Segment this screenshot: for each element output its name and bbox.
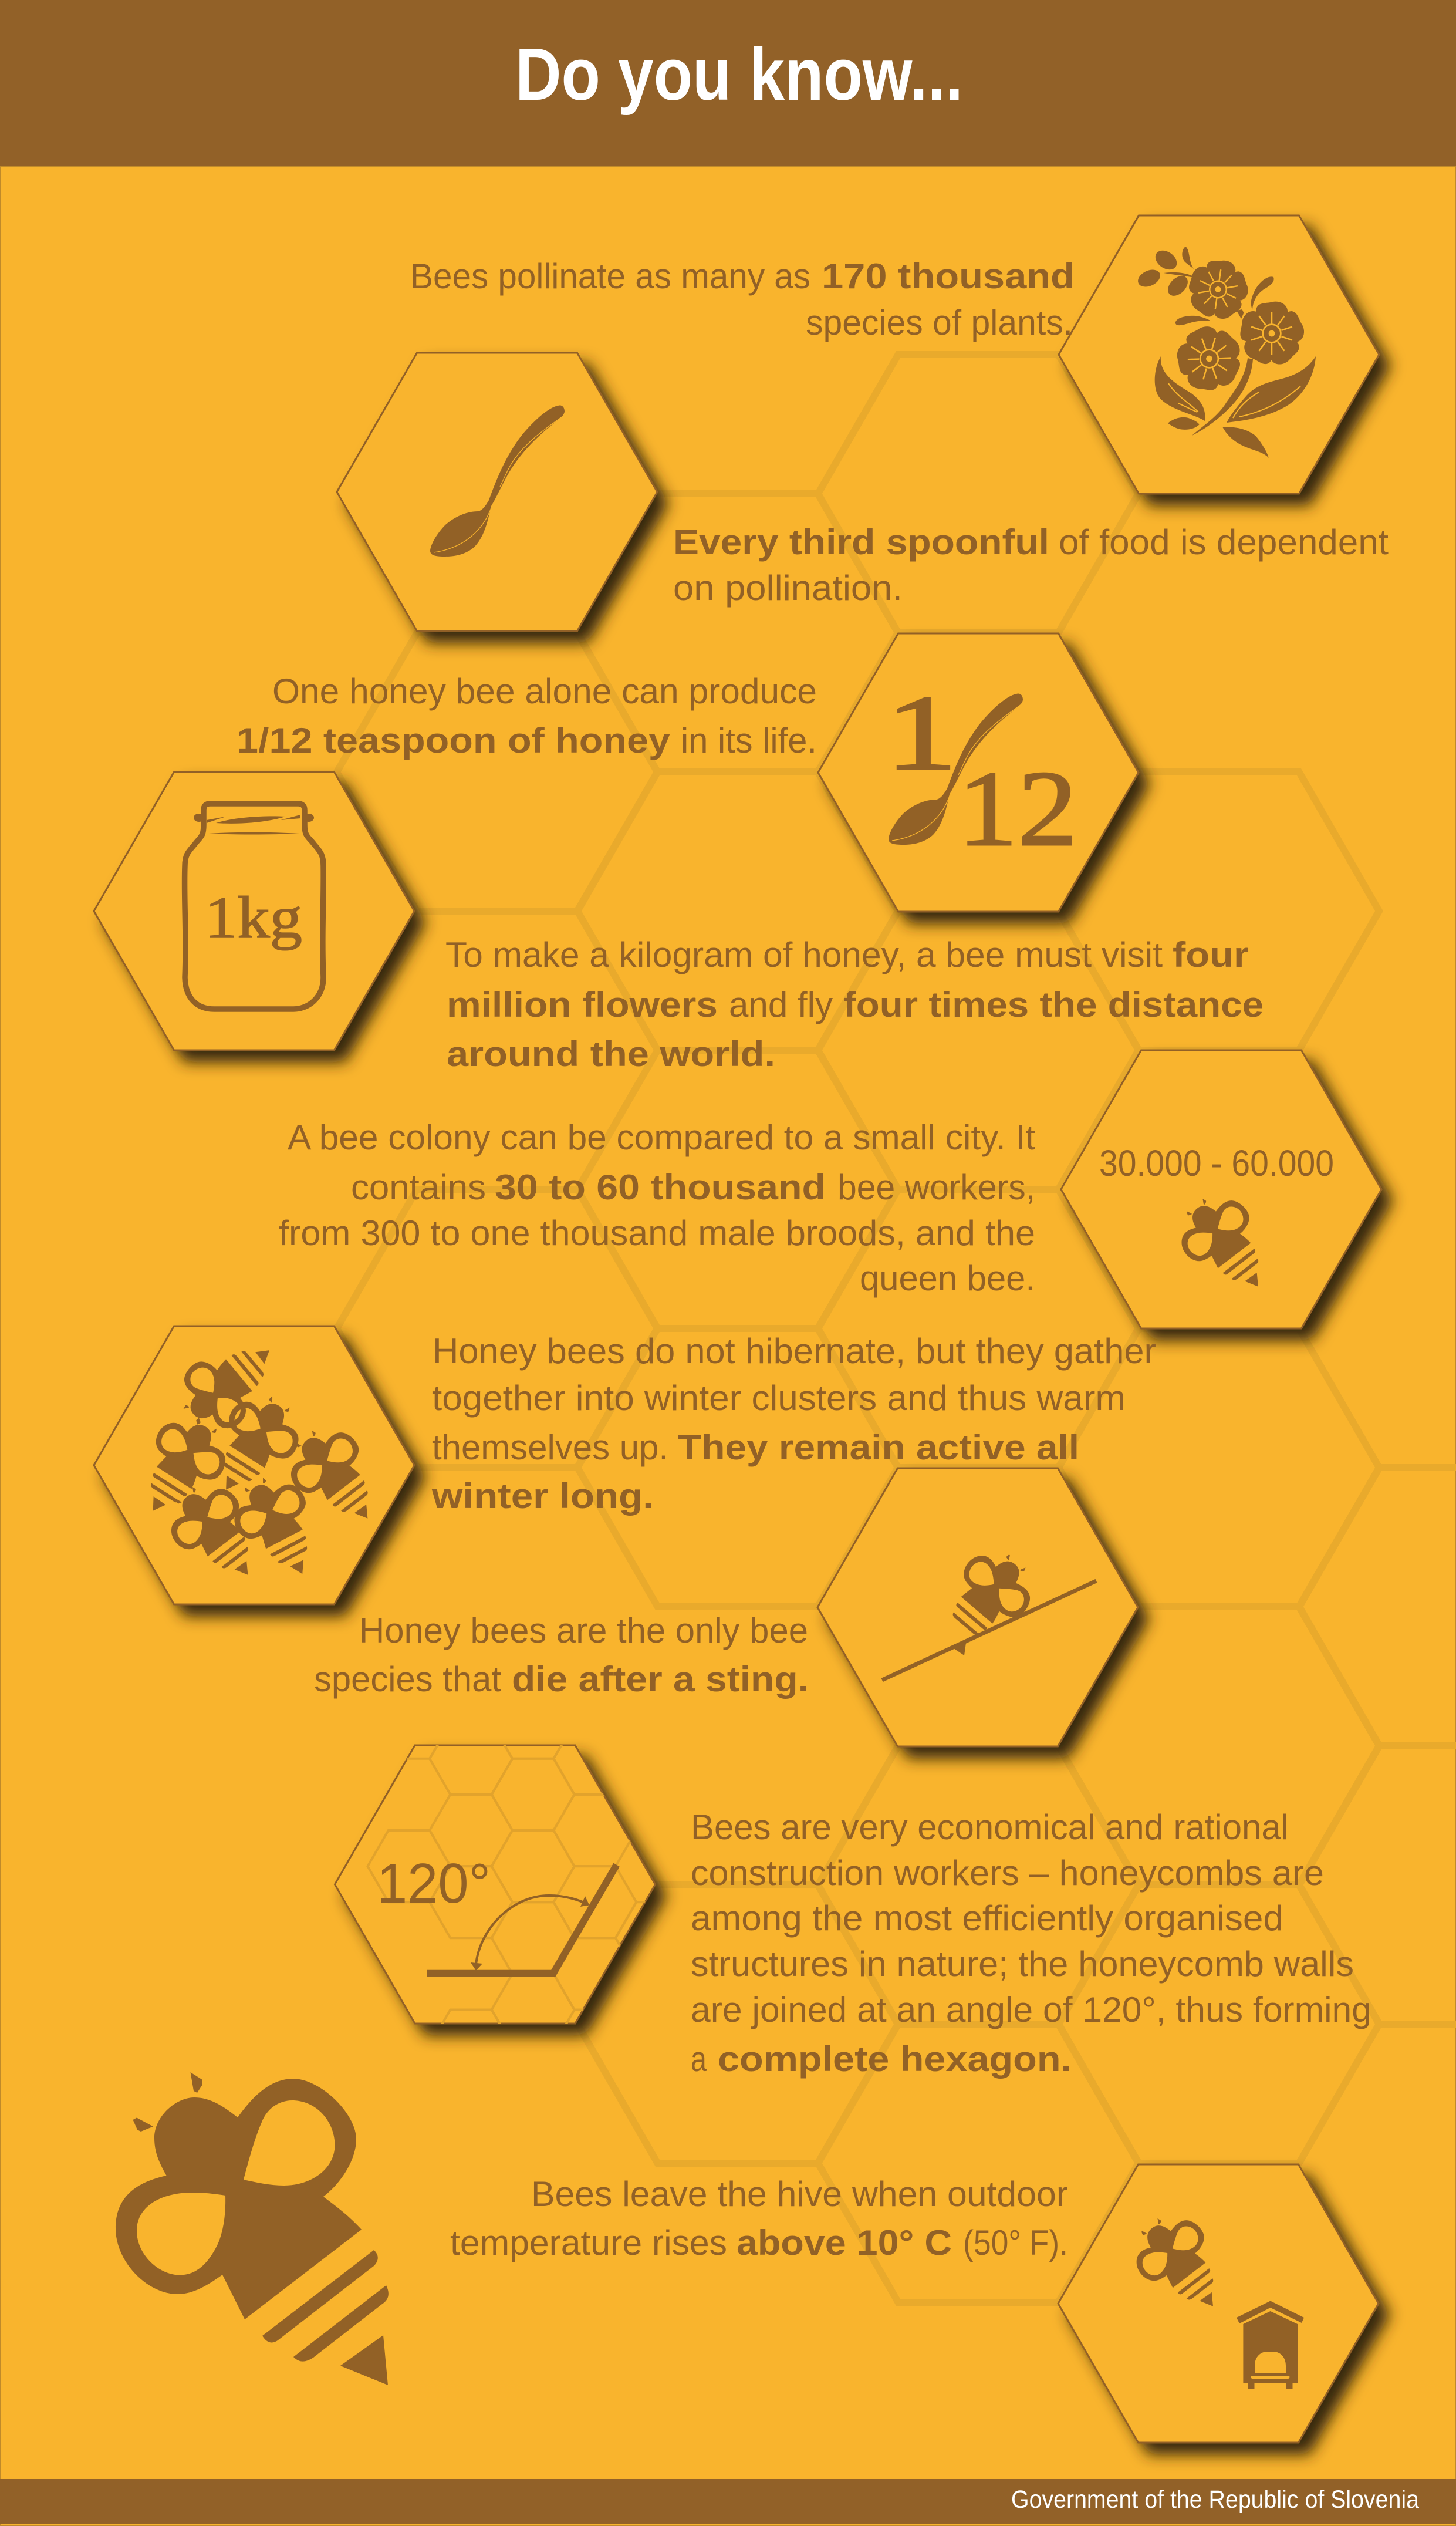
panel: 120 degree hexagon xyxy=(333,1742,1369,2079)
text: sting: Honey bees are the only bee xyxy=(359,1611,808,1650)
colony number: 30.000 - 60.000 xyxy=(1099,1143,1334,1184)
panel: winter cluster hexagon xyxy=(94,1326,1156,1604)
panel: flower hexagon xyxy=(410,215,1379,494)
jar label: 1kg xyxy=(205,885,302,951)
text: plants pollinated: species of plants. xyxy=(806,303,1073,342)
text: construction: structures in nature; the honeycomb walls xyxy=(691,1944,1354,1984)
text: teaspoon xyxy=(237,672,817,760)
text: spoonful: Every third spoonful xyxy=(673,522,1049,562)
icon: beehive xyxy=(1237,2301,1304,2389)
text: construction xyxy=(691,1807,1371,2079)
text: colony: A bee colony can be compared to a small city. It xyxy=(288,1118,1035,1157)
honeycomb inside hexagon xyxy=(367,1687,698,2082)
text: plants pollinated: Bees pollinate as many as xyxy=(410,257,810,296)
icon: honey jar xyxy=(185,804,323,1009)
text: construction: among the most efficiently organised xyxy=(691,1898,1283,1938)
icon: bee cluster xyxy=(127,1350,368,1575)
text: kilogram of honey: To make a kilogram of honey, a bee must visit xyxy=(445,935,1163,974)
text: colony: bee workers, xyxy=(837,1168,1035,1207)
text: construction: complete hexagon. xyxy=(718,2039,1072,2079)
text: kilogram of honey xyxy=(445,935,1264,1074)
text: kilogram of honey: and fly xyxy=(729,985,833,1024)
icon: fraction with spoon: 12 xyxy=(958,748,1077,868)
text: construction: a xyxy=(691,2039,707,2079)
text: spoonful: of food is dependent xyxy=(1059,522,1389,562)
text: kilogram of honey: four xyxy=(1173,935,1249,974)
icon: bee xyxy=(1182,1199,1258,1287)
text: temperature: (50° F). xyxy=(963,2223,1068,2262)
text: colony: queen bee. xyxy=(860,1259,1035,1298)
text: spoonful: on pollination. xyxy=(673,568,903,608)
honeycomb background lattice xyxy=(337,355,1456,2302)
text: construction: Bees are very economical and rational xyxy=(691,1807,1289,1847)
text: construction: are joined at an angle of 120°, thus forming xyxy=(691,1990,1371,2029)
text: winter clusters: They remain active all xyxy=(678,1428,1079,1467)
panel: sting hexagon xyxy=(314,1468,1138,1746)
text: winter clusters: winter long. xyxy=(431,1476,654,1516)
icon: large bee xyxy=(116,2072,389,2385)
text: sting: species that xyxy=(314,1660,501,1699)
text: sting xyxy=(314,1611,809,1699)
angle label: 120° xyxy=(377,1852,491,1915)
icon: small bee xyxy=(1137,2218,1213,2306)
text: teaspoon: One honey bee alone can produce xyxy=(272,672,817,711)
text: winter clusters xyxy=(431,1331,1156,1516)
text: winter clusters: Honey bees do not hibernate, but they gather xyxy=(433,1331,1156,1371)
icon: bee on skin with stinger xyxy=(882,1547,1096,1680)
text: kilogram of honey: four times the distance xyxy=(843,985,1264,1024)
text: colony: 30 to 60 thousand xyxy=(495,1168,826,1207)
footer credit: Government of the Republic of Slovenia xyxy=(1011,2485,1419,2514)
header band xyxy=(0,0,1456,166)
text: temperature: above 10° C xyxy=(737,2223,952,2262)
text: sting: die after a sting. xyxy=(512,1660,809,1699)
text: colony xyxy=(279,1118,1035,1298)
text: temperature: Bees leave the hive when outdoor xyxy=(531,2174,1068,2214)
icon: flowers xyxy=(1135,247,1316,458)
text: kilogram of honey: around the world. xyxy=(447,1034,775,1074)
text: colony: contains xyxy=(351,1168,486,1207)
text: plants pollinated xyxy=(410,257,1075,342)
title: Do you know... xyxy=(515,33,963,116)
text: colony: from 300 to one thousand male broods, and the xyxy=(279,1213,1035,1253)
text: teaspoon: in its life. xyxy=(681,721,817,760)
text: construction: construction workers – honeycombs are xyxy=(691,1853,1324,1893)
text: winter clusters: together into winter clusters and thus warm xyxy=(432,1378,1126,1418)
text: temperature xyxy=(450,2174,1068,2262)
text: winter clusters: themselves up. xyxy=(432,1428,668,1467)
icon: fraction with spoon xyxy=(885,673,1077,868)
text: temperature: temperature rises xyxy=(450,2223,727,2262)
panel: colony hexagon xyxy=(279,1050,1381,1328)
text: spoonful xyxy=(673,522,1389,608)
panel: one twelfth hexagon xyxy=(237,633,1139,912)
panel: jar hexagon xyxy=(94,772,1264,1074)
panel: hive hexagon xyxy=(450,2164,1379,2443)
footer band xyxy=(0,2479,1456,2524)
icon: wall angle with arc xyxy=(427,1865,617,1974)
panel: spoon hexagon xyxy=(337,353,1389,631)
text: teaspoon: 1/12 teaspoon of honey xyxy=(237,721,671,760)
text: plants pollinated: 170 thousand xyxy=(822,257,1075,296)
text: kilogram of honey: million flowers xyxy=(447,985,718,1024)
icon: spoon xyxy=(430,405,565,557)
icon: fraction with spoon: 1 xyxy=(885,673,958,792)
